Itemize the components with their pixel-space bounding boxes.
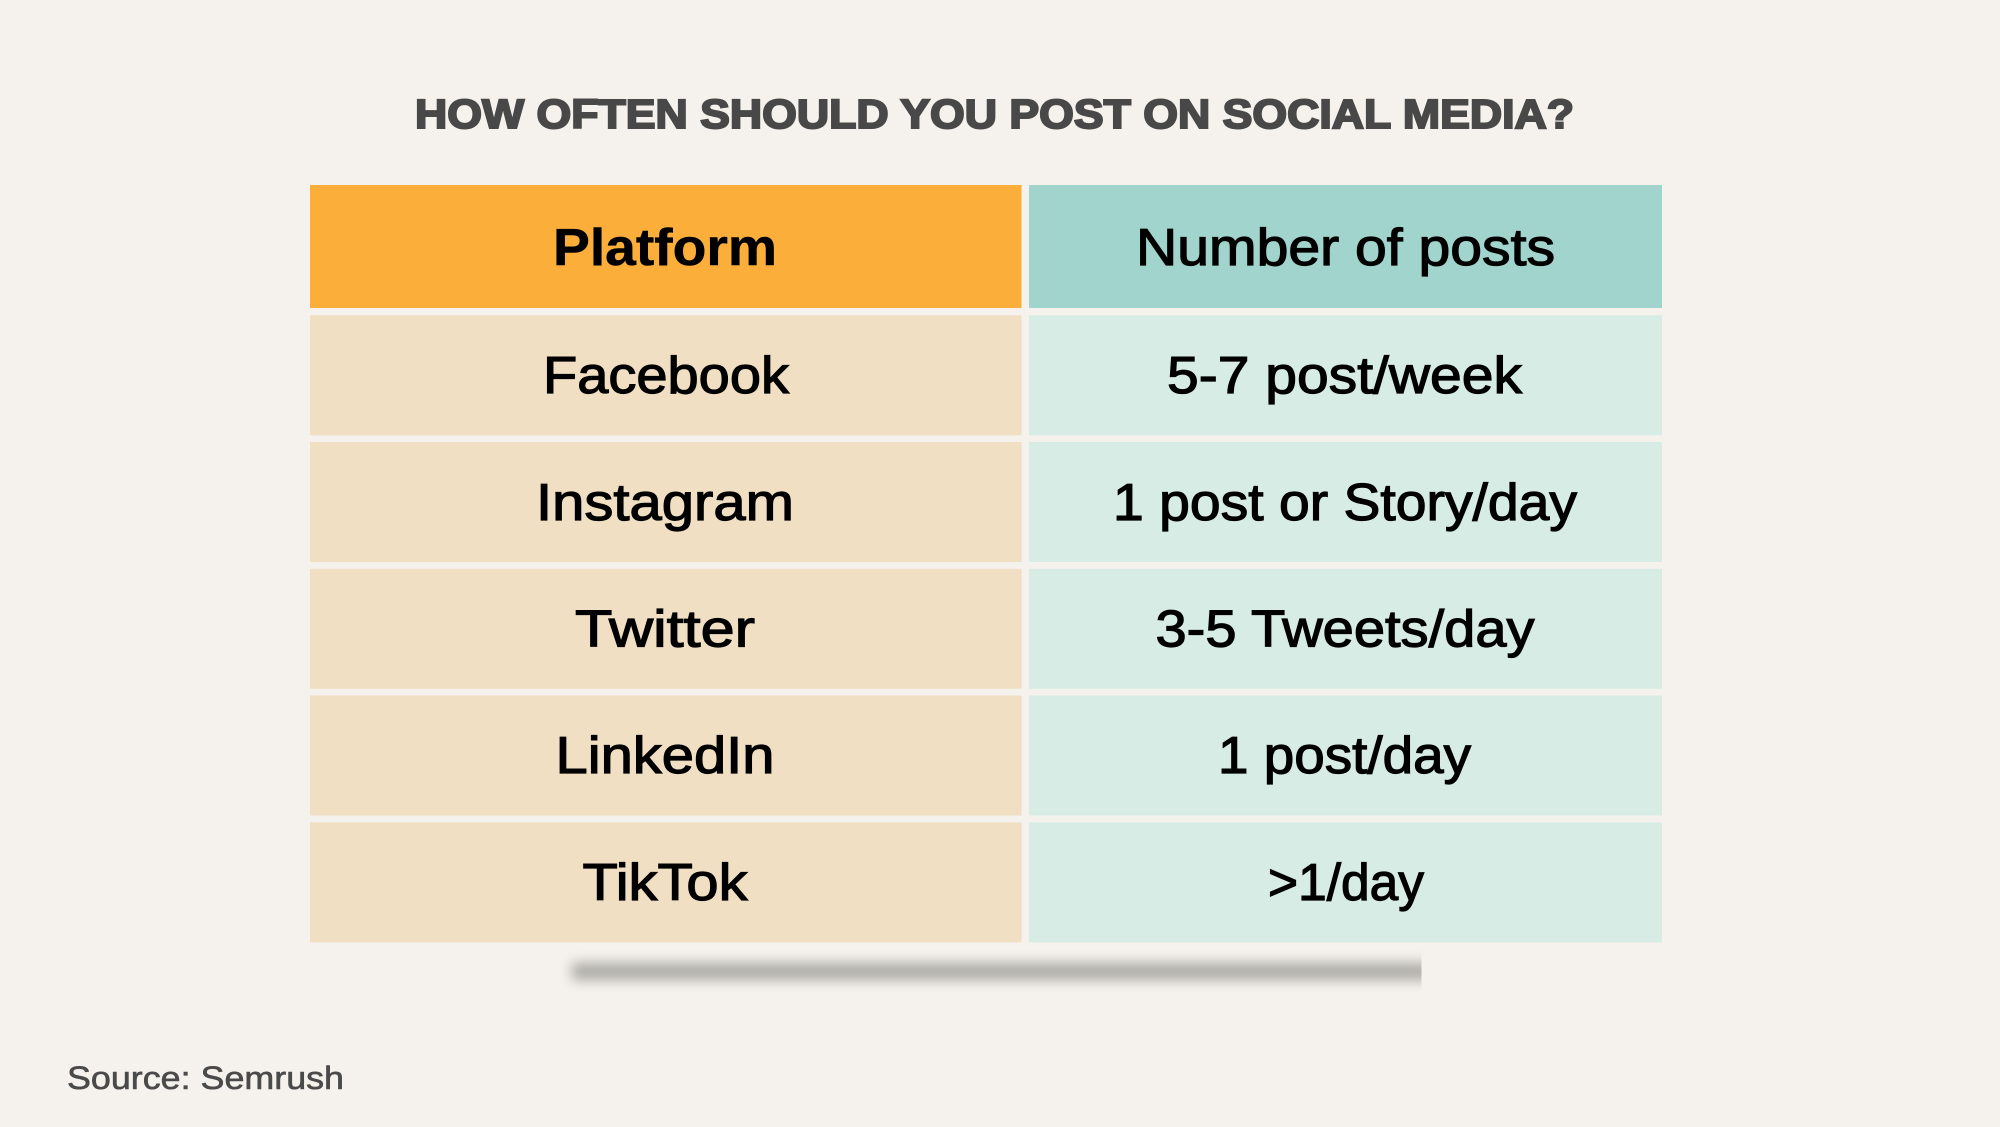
row: LinkedIn: 1 post/day <box>1218 727 1471 785</box>
row: LinkedIn <box>310 696 1662 816</box>
row: Instagram: 1 post or Story/day <box>1113 474 1577 532</box>
row: Facebook: 5-7 post/week <box>1167 347 1523 405</box>
header cell: Platform <box>310 185 1022 308</box>
row: Instagram: Instagram <box>536 474 794 532</box>
row: Facebook <box>310 315 1662 435</box>
row: LinkedIn: LinkedIn <box>556 727 774 785</box>
row: Twitter: Twitter <box>575 600 755 658</box>
row: TikTok: TikTok <box>582 854 749 912</box>
title: HOW OFTEN SHOULD YOU POST ON SOCIAL MEDIA? <box>415 91 1574 137</box>
row: Facebook: Facebook <box>543 347 790 405</box>
source note: Source: Semrush <box>67 1060 344 1096</box>
header cell: Platform: Platform <box>553 219 777 277</box>
row: TikTok: >1/day <box>1268 854 1424 912</box>
row: TikTok <box>310 822 1662 942</box>
header cell: Number of posts <box>1029 185 1662 308</box>
panel: posting frequency table <box>310 185 1662 942</box>
row: Twitter: 3-5 Tweets/day <box>1156 600 1534 658</box>
header cell: Number of posts: Number of posts <box>1136 219 1555 277</box>
row: Twitter <box>310 569 1662 689</box>
table drop shadow <box>572 963 1472 980</box>
row: Instagram <box>310 442 1662 562</box>
